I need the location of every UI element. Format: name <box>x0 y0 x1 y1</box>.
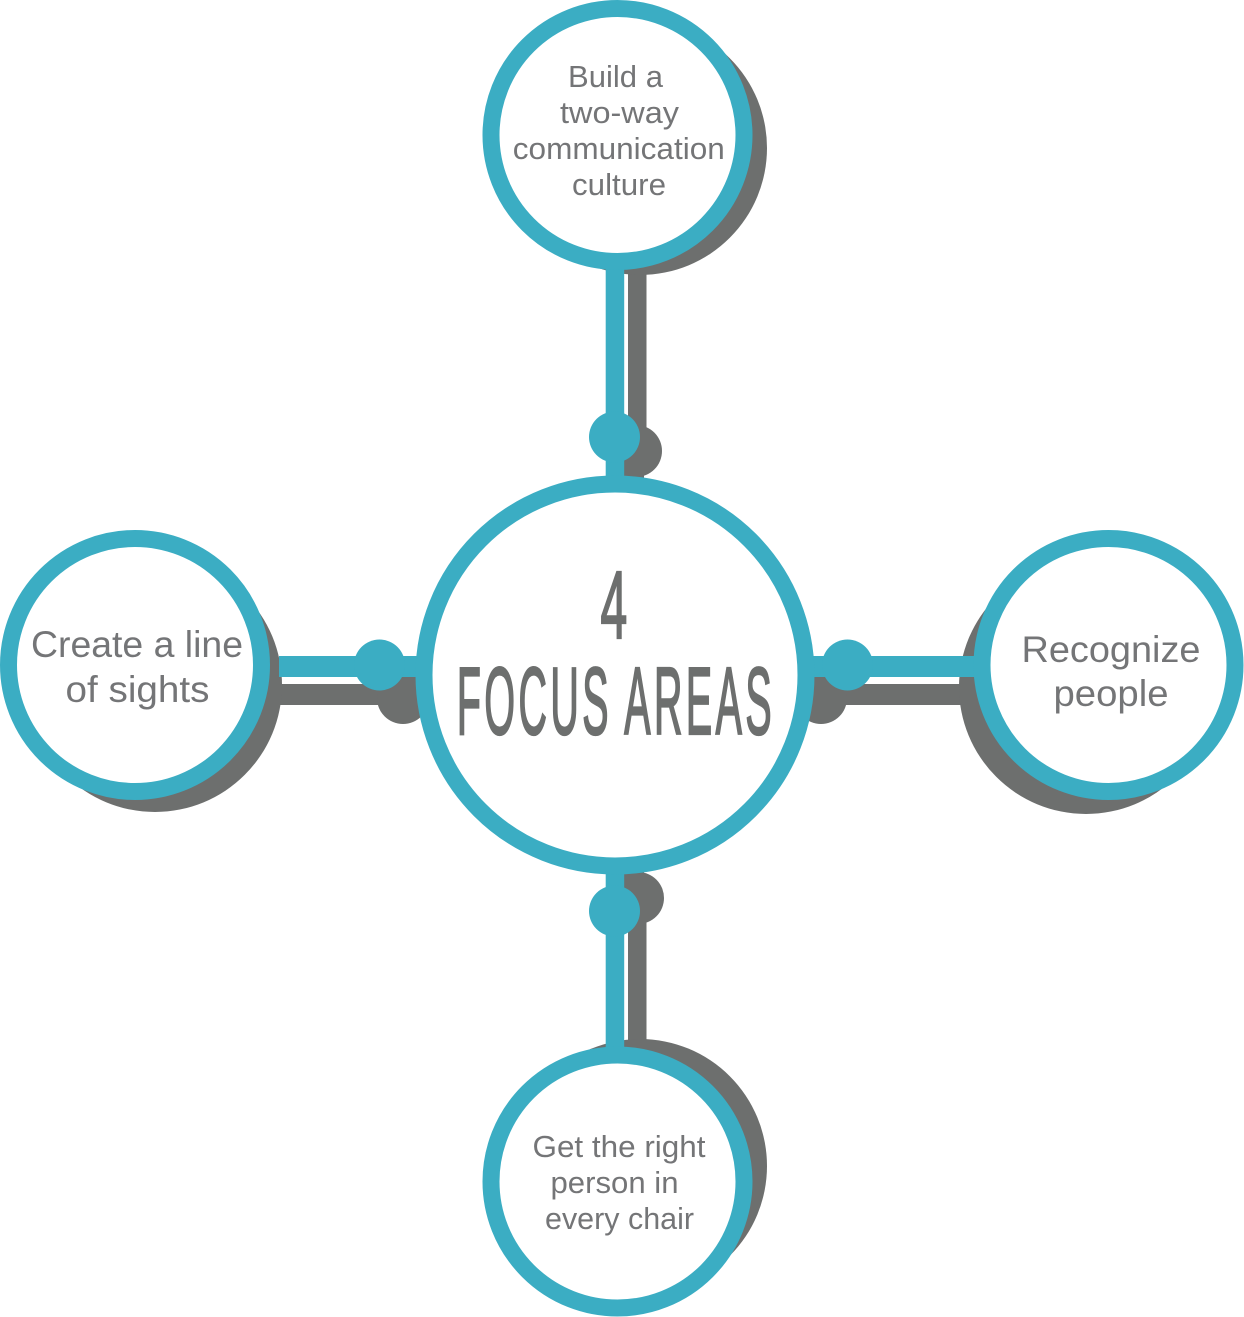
bottom circle: right person <box>491 1055 744 1308</box>
bottom circle: right person: Get the right <box>532 1129 706 1164</box>
bottom circle: right person: person in <box>550 1165 678 1200</box>
right circle: recognize people <box>982 538 1235 792</box>
top circle: two-way communication <box>491 8 744 262</box>
left circle: line of sights <box>8 538 262 792</box>
central circle: 4 focus areas <box>424 484 806 866</box>
bottom circle: right person: every chair <box>545 1201 694 1236</box>
connector nodes <box>354 412 873 936</box>
right circle: recognize people: Recognize <box>1022 629 1200 670</box>
top circle: two-way communication: Build a <box>568 59 664 94</box>
central circle: 4 focus areas: FOCUS AREAS <box>457 648 775 755</box>
top circle: two-way communication: culture <box>572 167 666 202</box>
left circle: line of sights: Create a line <box>31 624 243 665</box>
top circle: two-way communication: communication <box>513 131 725 166</box>
right circle: recognize people: people <box>1054 673 1168 714</box>
central circle: 4 focus areas: 4 <box>600 552 627 660</box>
connectors <box>279 260 990 1060</box>
left circle: line of sights: of sights <box>66 669 210 710</box>
top circle: two-way communication: two-way <box>560 95 680 130</box>
